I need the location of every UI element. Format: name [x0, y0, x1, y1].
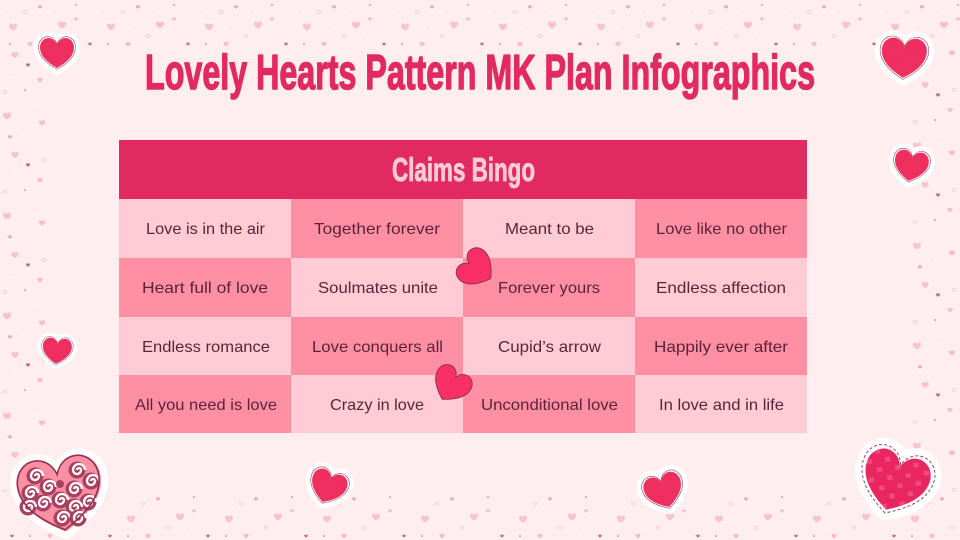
panel: claims bingo table: [119, 140, 807, 433]
cell: Endless affection: [635, 258, 807, 317]
cell: Crazy in love: [291, 375, 463, 433]
cell: Together forever: [291, 199, 463, 258]
icon: sticker heart bottom center left: [304, 464, 352, 510]
cell: Forever yours: Forever yours: [498, 280, 600, 297]
cell: Heart full of love: [119, 258, 291, 317]
cell: Unconditional love: Unconditional love: [481, 397, 618, 414]
cell: Together forever: Together forever: [314, 221, 440, 238]
icon: sticker heart right: [890, 147, 932, 185]
icon: patterned heart bottom right: [850, 440, 940, 524]
cell: Happily ever after: [635, 317, 807, 375]
cell: Endless romance: Endless romance: [142, 339, 270, 356]
icon: sticker heart left: [40, 336, 74, 366]
cell: In love and in life: [635, 375, 807, 433]
icon: sticker heart bottom center right: [639, 467, 689, 515]
cell: Love like no other: Love like no other: [656, 221, 787, 238]
cell: Happily ever after: Happily ever after: [654, 339, 788, 356]
cell: Cupid's arrow: [463, 317, 635, 375]
cell: Love is in the air: [119, 199, 291, 258]
cell: Endless affection: Endless affection: [656, 280, 786, 297]
icon: sticker heart top left: [38, 37, 76, 69]
cell: All you need is love: [119, 375, 291, 433]
cell: Meant to be: [463, 199, 635, 258]
cell: Heart full of love: Heart full of love: [142, 280, 268, 297]
cell: Meant to be: Meant to be: [505, 221, 594, 238]
icon: swirl heart bottom left: [13, 452, 109, 538]
cell: Soulmates unite: Soulmates unite: [318, 280, 438, 297]
icon: heart on table lower: [426, 361, 476, 409]
cell: Forever yours: [463, 258, 635, 317]
table header: [119, 140, 807, 199]
cell: Endless romance: [119, 317, 291, 375]
cell: Soulmates unite: [291, 258, 463, 317]
cell: All you need is love: All you need is love: [135, 397, 277, 414]
cell: Love is in the air: Love is in the air: [146, 221, 265, 238]
icon: heart on table upper: [452, 244, 502, 294]
cell: Love like no other: [635, 199, 807, 258]
cell: Crazy in love: Crazy in love: [330, 397, 424, 414]
cell: Unconditional love: [463, 375, 635, 433]
icon: sticker heart top right: [879, 35, 929, 81]
cell: In love and in life: In love and in life: [659, 397, 784, 414]
cell: Love conquers all: Love conquers all: [312, 339, 443, 356]
cell: Cupid's arrow: Cupid’s arrow: [498, 339, 602, 356]
cell: Love conquers all: [291, 317, 463, 375]
table header: Claims Bingo: [392, 151, 535, 188]
